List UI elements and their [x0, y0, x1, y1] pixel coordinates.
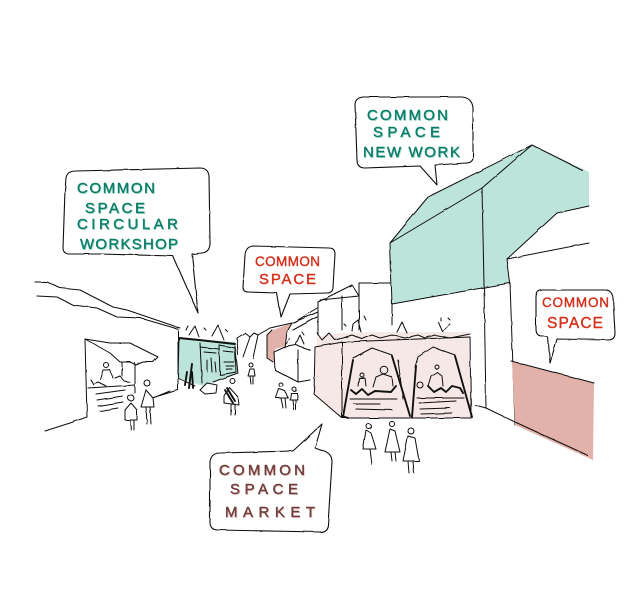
callout: common space circular workshop: WORKSHOP — [81, 237, 179, 254]
icon: pedestrians in the street — [224, 363, 419, 473]
callout: common space circular workshop: COMMON — [78, 181, 156, 198]
callout: common space new work: NEW WORK — [364, 145, 461, 162]
panel: market hall with tents — [313, 316, 473, 418]
panel: market stall on left — [85, 339, 158, 430]
callout: common space new work: COMMON — [368, 108, 449, 125]
callout: common space market: COMMON — [219, 462, 305, 479]
callout: common space circular workshop: CIRCULAR — [78, 217, 179, 234]
callout: common space market: MARKET — [226, 505, 316, 522]
callout: common space market: COMMON — [220, 463, 306, 480]
panel: distant buildings — [237, 312, 318, 382]
callout: common space right — [536, 290, 615, 363]
callout: common space circular workshop: WORKSHOP — [80, 236, 178, 253]
callout: common space centre: COMMON — [255, 254, 320, 269]
callout: common space centre — [243, 246, 335, 317]
callout: common space centre: SPACE — [259, 271, 316, 288]
callout: common space market — [210, 424, 332, 532]
callout: common space market: SPACE — [231, 482, 299, 499]
callout: common space market: MARKET — [225, 504, 315, 521]
callout: common space circular workshop: SPACE — [86, 201, 146, 218]
panel: new work building with mint fill — [293, 145, 589, 425]
callout: common space right: COMMON — [542, 295, 609, 310]
panel: left street wall — [35, 282, 180, 431]
callout: common space circular workshop — [63, 168, 210, 313]
callout: common space circular workshop: COMMON — [77, 180, 155, 197]
callout: common space new work: COMMON — [367, 107, 448, 124]
callout: common space circular workshop: SPACE — [85, 200, 145, 217]
callout: common space right: SPACE — [547, 315, 603, 332]
callout: common space new work: SPACE — [373, 124, 440, 141]
callout: common space new work: SPACE — [374, 125, 441, 142]
callout: common space new work — [355, 97, 473, 185]
callout: common space circular workshop: CIRCULAR — [77, 216, 178, 233]
callout: common space market: SPACE — [230, 481, 298, 498]
callout: common space new work: NEW WORK — [363, 144, 460, 161]
panel: common space wall with pink fill — [511, 361, 594, 460]
panel: circular workshop shed — [178, 325, 238, 394]
